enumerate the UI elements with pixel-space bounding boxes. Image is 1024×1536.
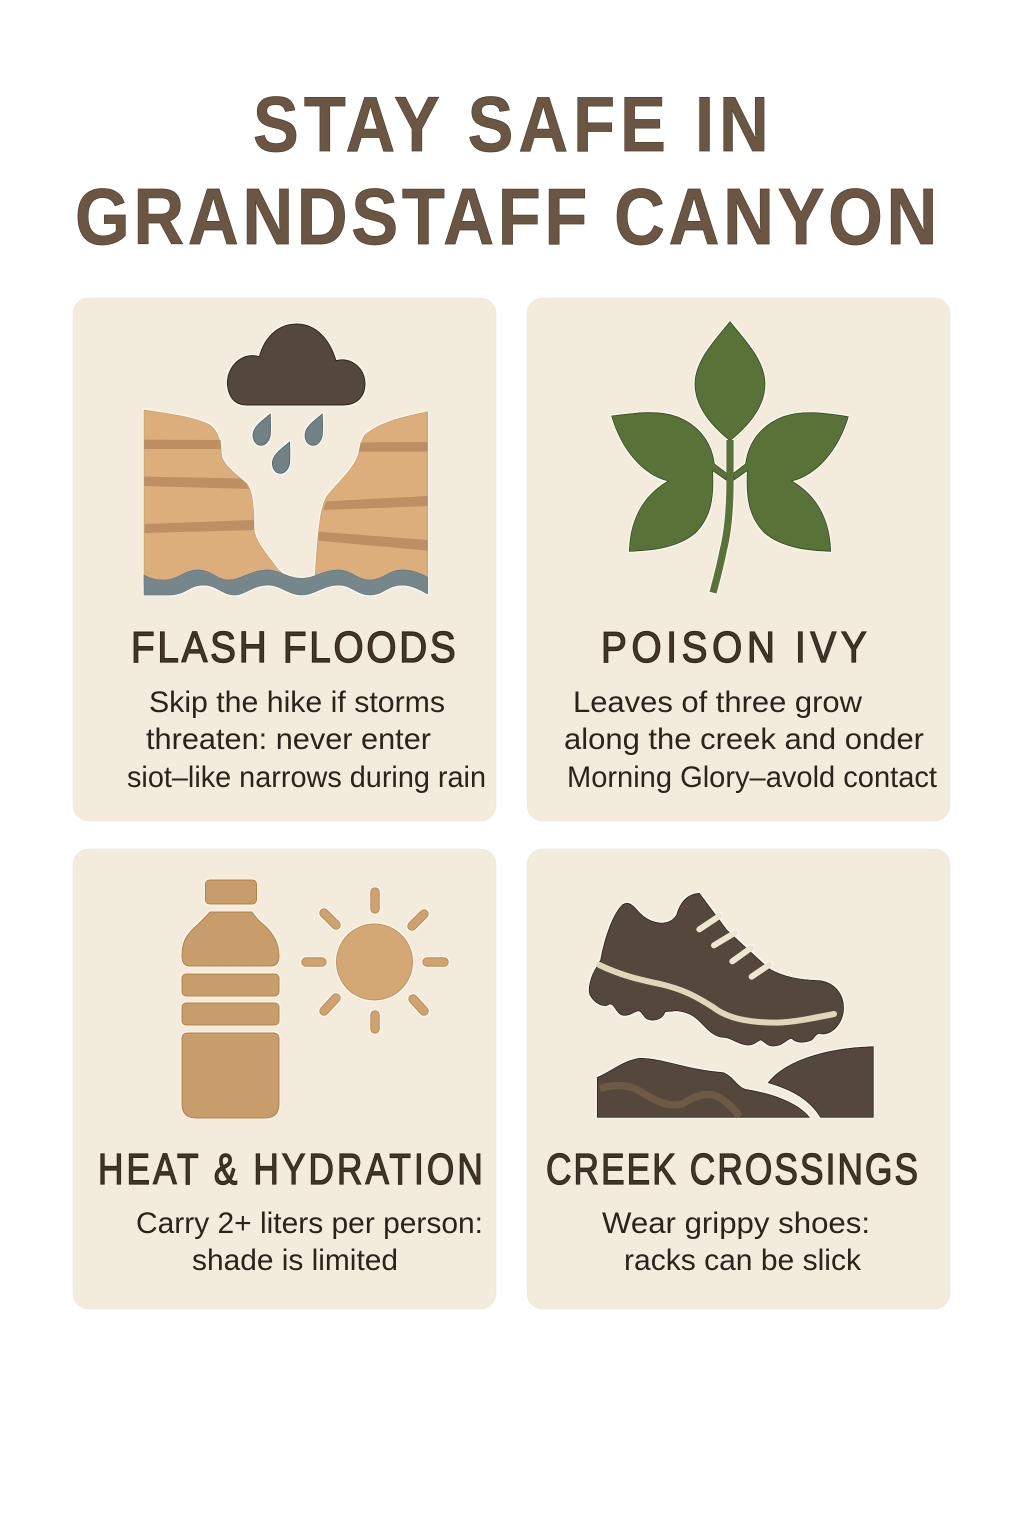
text: poison ivy body: along the creek and onder	[564, 723, 924, 756]
icon: water bottle	[182, 880, 279, 1118]
text: heat and hydration body: shade is limited	[192, 1244, 398, 1277]
title: STAY SAFE IN	[253, 80, 769, 168]
text: creek crossings body	[602, 1207, 870, 1277]
heading: flash floods: FLASH FLOODS	[131, 622, 456, 672]
icon: storm cloud over canyon with flood water	[144, 324, 428, 595]
heading: creek crossings: CREEK CROSSINGS	[546, 1145, 918, 1194]
text: poison ivy body	[564, 686, 938, 794]
text: flash floods body	[127, 686, 486, 794]
text: flash floods body: Skip the hike if storms	[149, 686, 445, 719]
text: poison ivy body: Leaves of three grow	[573, 686, 862, 719]
title	[75, 80, 937, 261]
text: heat and hydration body	[136, 1207, 483, 1277]
heading: poison ivy: POISON IVY	[601, 622, 867, 672]
text: creek crossings body: racks can be slick	[624, 1244, 862, 1277]
text: flash floods body: threaten: never enter	[146, 723, 431, 756]
panel: heat and hydration	[74, 850, 496, 1308]
panel: creek crossings	[528, 850, 950, 1308]
icon: sun	[306, 892, 444, 1029]
title: GRANDSTAFF CANYON	[75, 172, 937, 261]
icon: poison ivy leaves	[612, 322, 848, 593]
text: poison ivy body: Morning Glory–avold contact	[567, 761, 938, 794]
heading: heat and hydration: HEAT & HYDRATION	[98, 1145, 483, 1194]
text: heat and hydration body: Carry 2+ liters per person:	[136, 1207, 483, 1240]
panel: poison ivy	[528, 298, 950, 820]
icon: hiking shoe on rocks	[589, 893, 873, 1117]
text: flash floods body: siot–like narrows during rain	[127, 761, 486, 794]
text: creek crossings body: Wear grippy shoes:	[602, 1207, 870, 1240]
panel: flash floods	[74, 298, 496, 820]
